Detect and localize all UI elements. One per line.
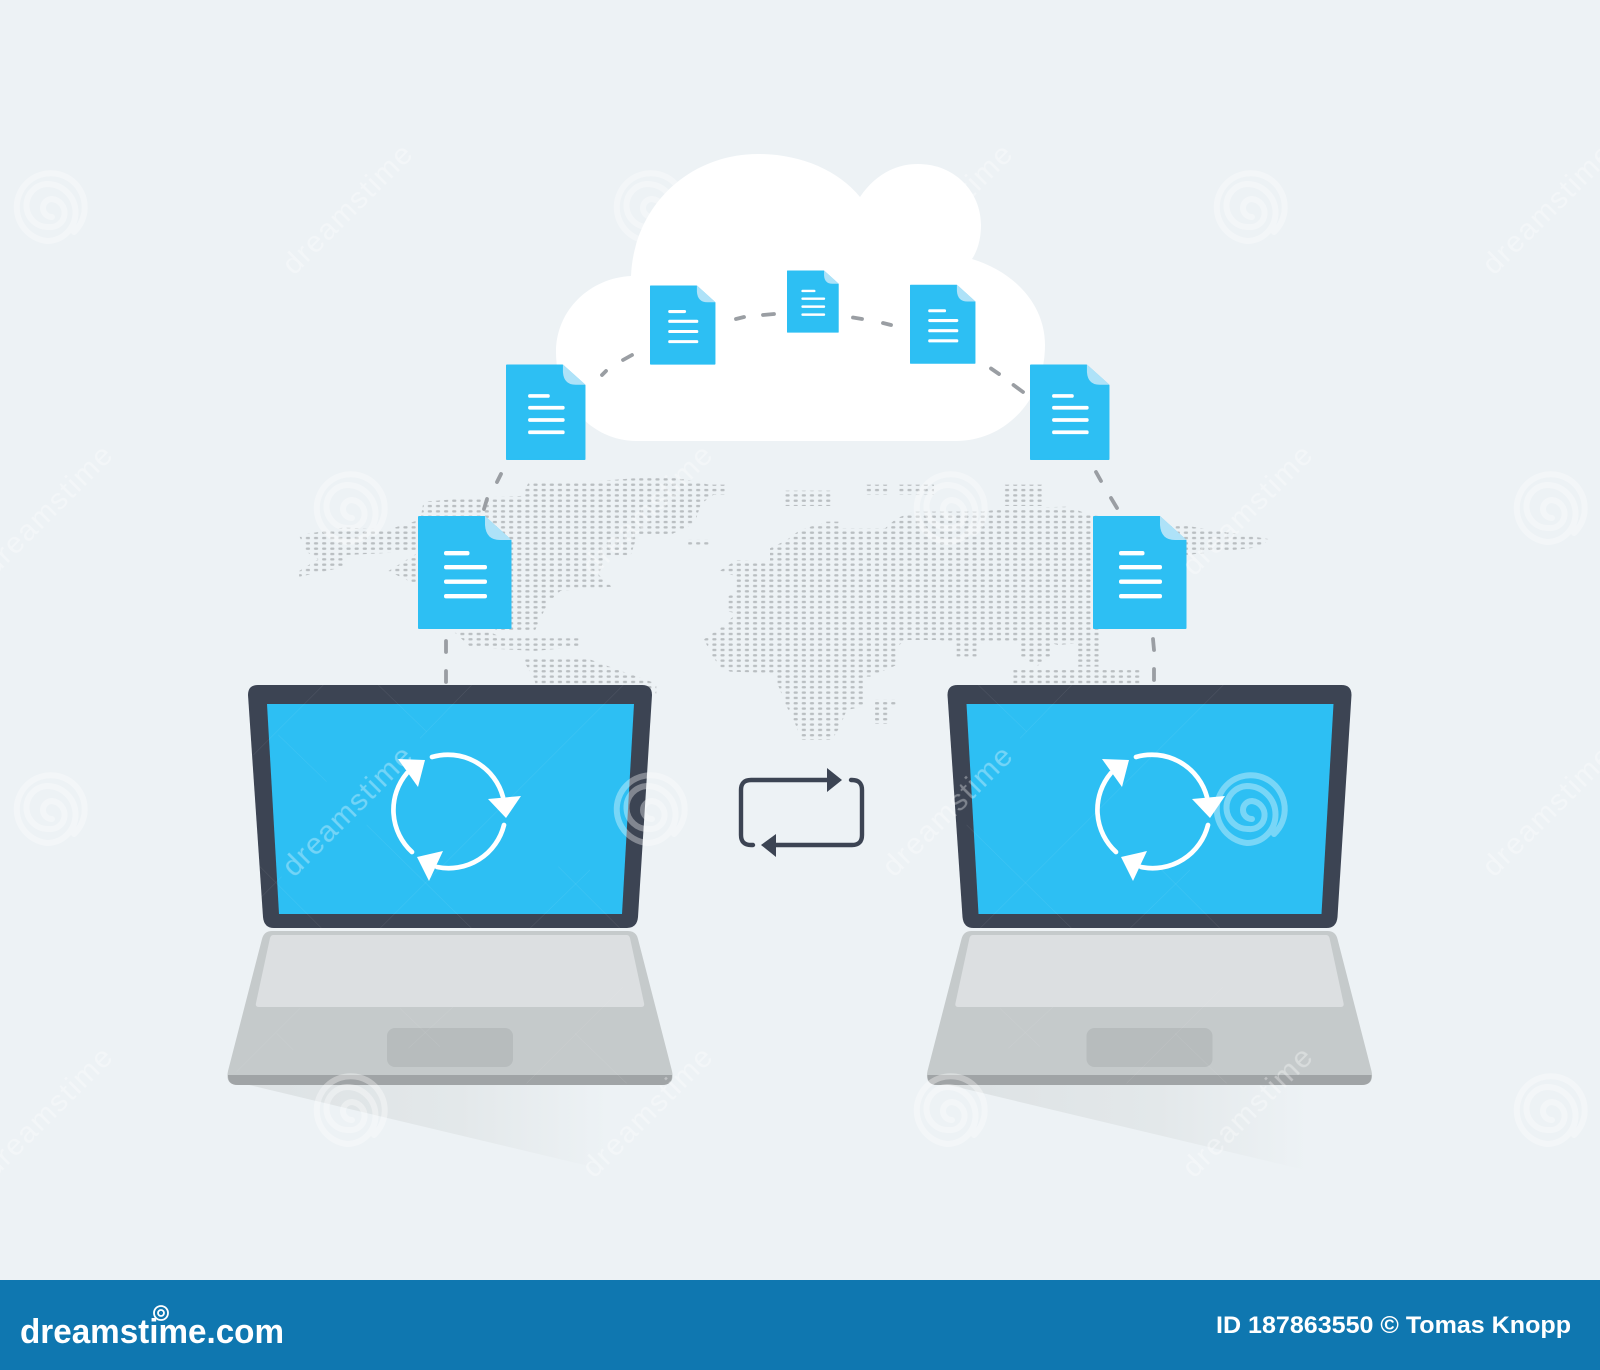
watermark text: dreamstime [1176,439,1319,582]
right laptop keyboard area [955,935,1344,1007]
left laptop front edge [228,1075,672,1085]
left laptop screen [267,704,634,914]
right laptop lid [948,685,1352,928]
dotted world map [290,470,1280,750]
watermark text: dreamstime [576,439,719,582]
right laptop [927,685,1372,1186]
dashed transfer path [446,314,1154,682]
right laptop sync icon [1097,755,1225,881]
icon: two-way repeat arrows [741,768,862,857]
left laptop keyboard area [256,935,644,1007]
footer credit: ID 187863550 © Tomas Knopp [1216,1312,1571,1339]
left laptop base [227,931,673,1085]
watermark text: dreamstime [876,138,1019,281]
watermark text: dreamstime [576,1041,719,1184]
document: right, medium [1031,364,1109,459]
left laptop sync icon [393,755,521,881]
right laptop touchpad [1086,1028,1212,1067]
watermark text: dreamstime [276,138,419,281]
cloud [556,154,1045,441]
footer bar [0,1280,1600,1370]
right laptop screen [966,704,1334,914]
footer logo spiral [154,1306,168,1320]
watermark text: dreamstime [1176,1041,1319,1184]
document: far left, large [419,516,512,628]
watermark spirals [17,173,1585,1144]
document: far right, large [1094,516,1186,628]
document: upper right, small [911,285,975,363]
footer logo: dreamstime.com [20,1313,284,1351]
document: left, medium [507,364,585,459]
document: top centre, smallest [788,270,839,332]
right laptop base [927,931,1372,1085]
left laptop touchpad [387,1028,513,1067]
watermark text [0,138,1600,1184]
right laptop front edge [928,1075,1372,1085]
left laptop lid [248,685,652,928]
watermark hairlines [237,685,1227,1083]
watermark text: dreamstime [876,740,1019,883]
right laptop shadow [944,1084,1372,1186]
left laptop shadow [245,1084,672,1186]
document: upper left, small [651,286,715,364]
left laptop [227,685,673,1186]
watermark text: dreamstime [276,740,419,883]
